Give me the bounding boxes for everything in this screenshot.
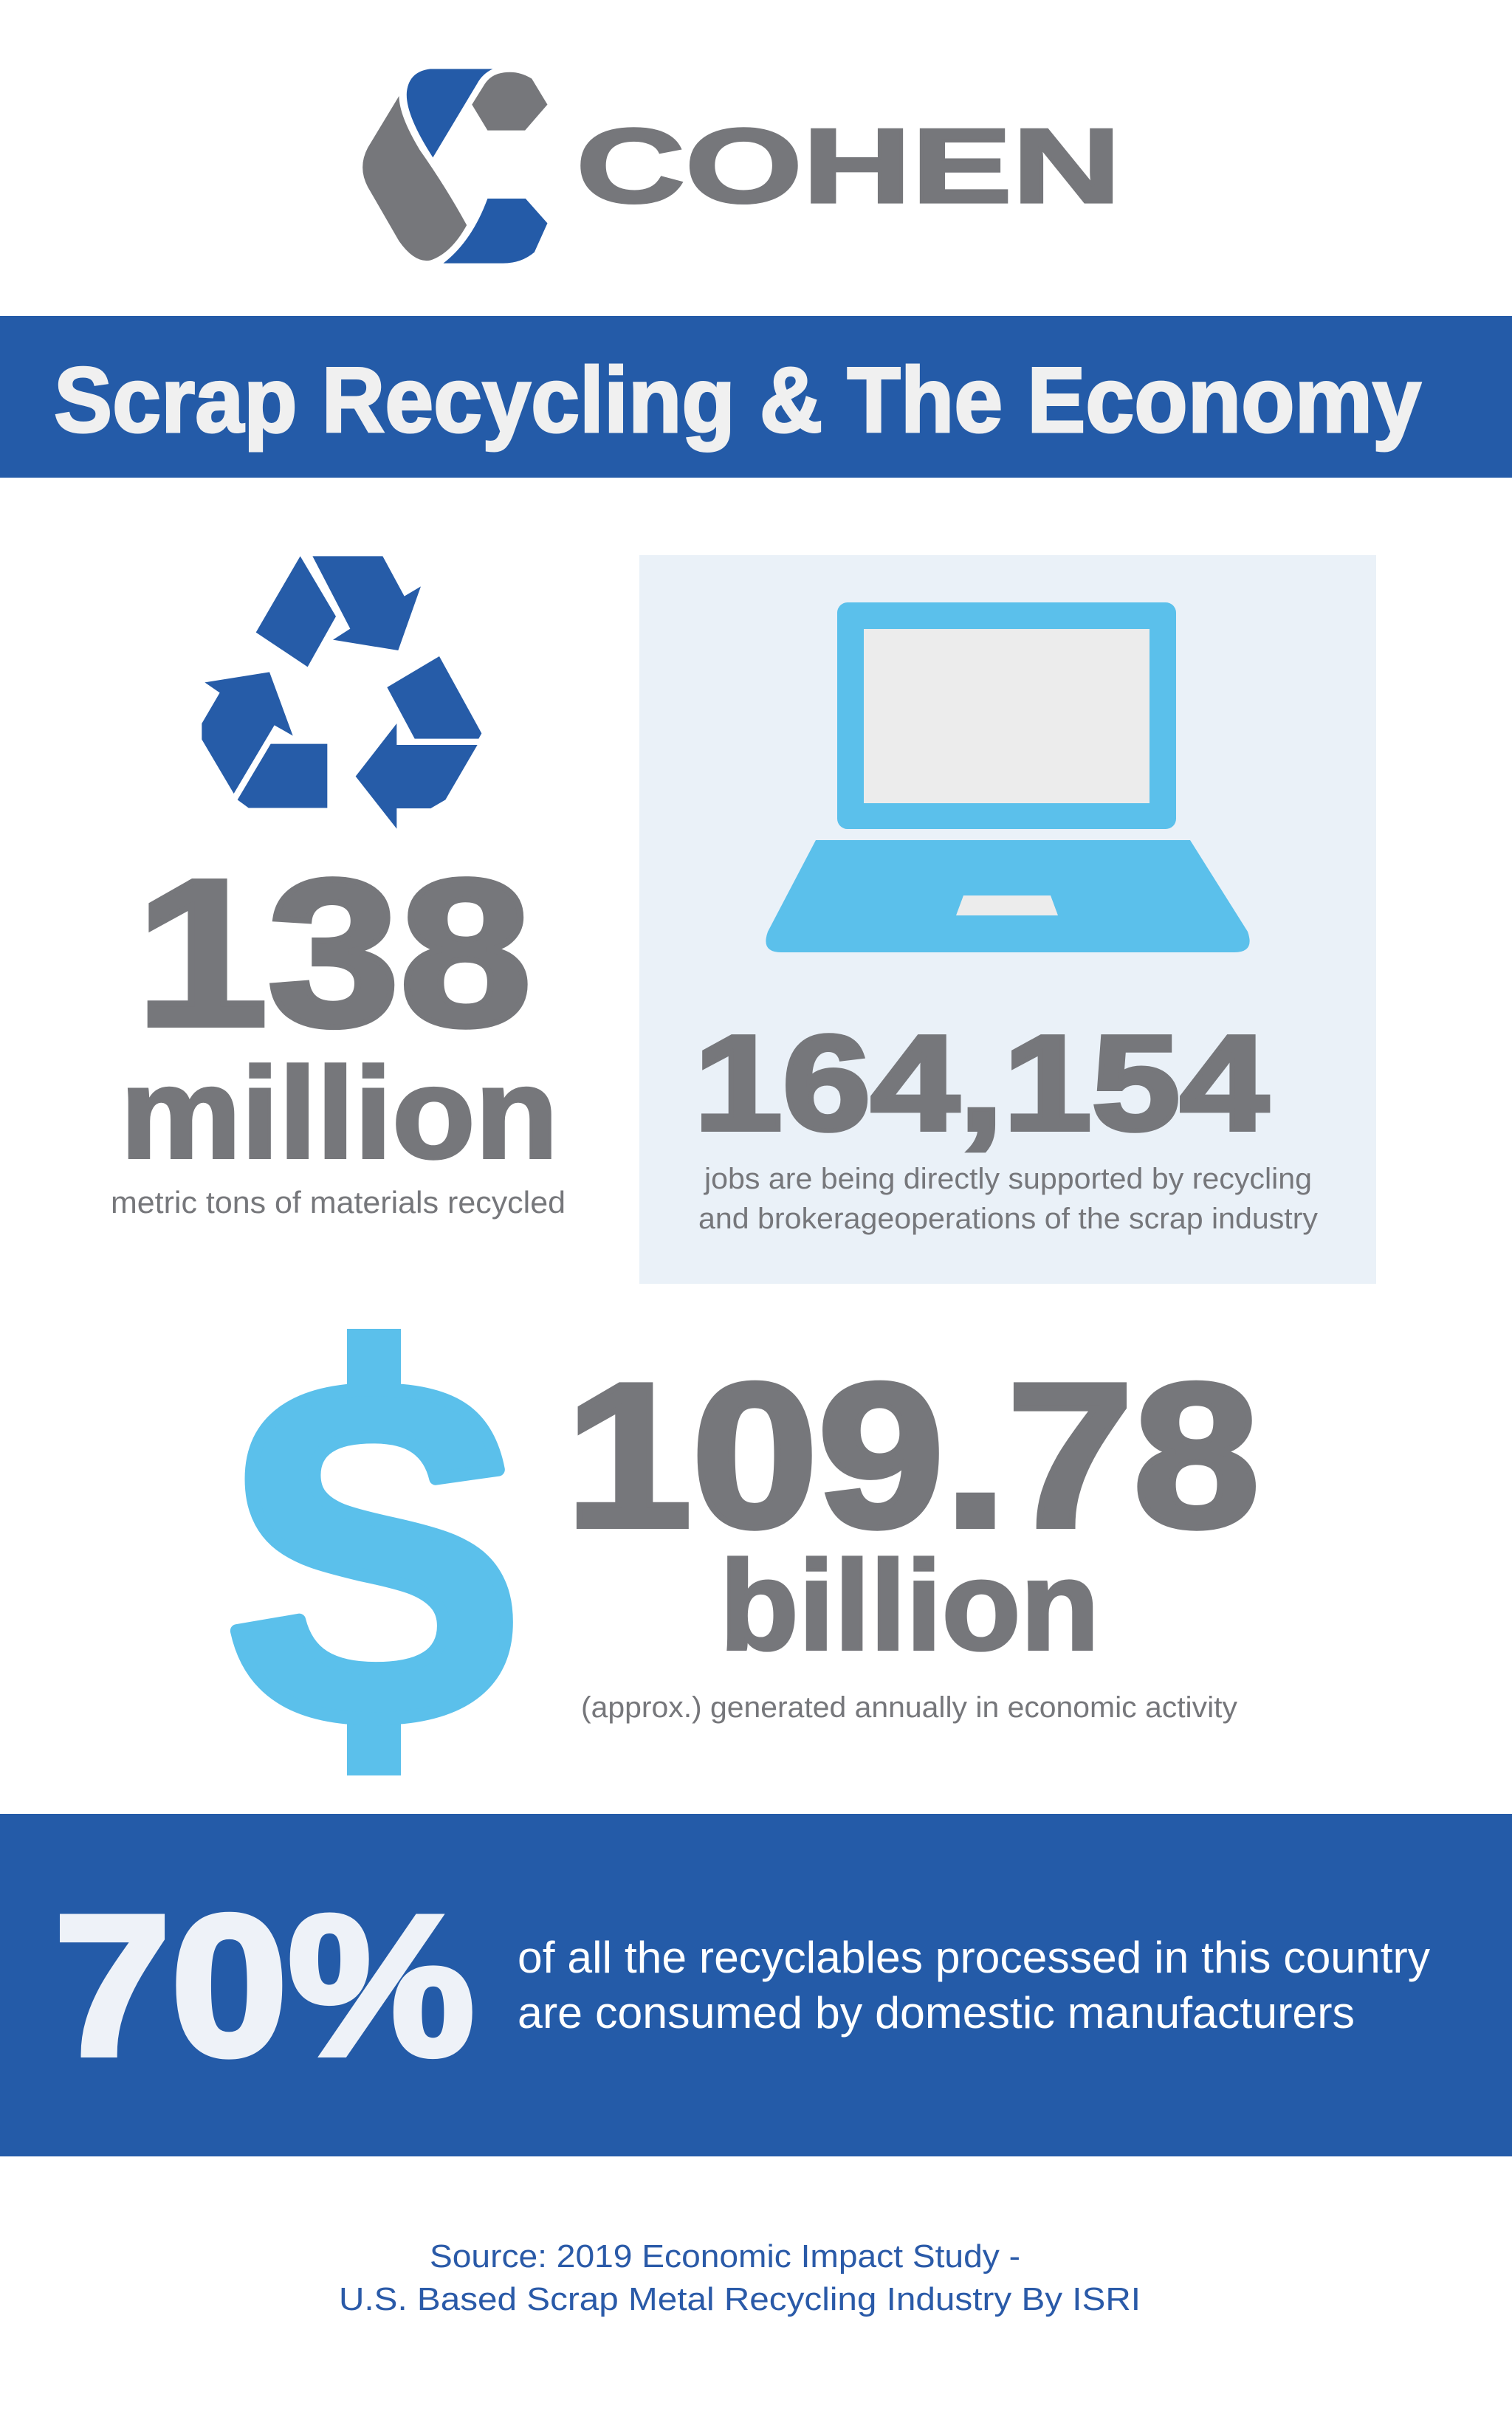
panel: jobs: and brokerageoperations of the scrap industry [698,1203,1318,1235]
icon: laptop [766,602,1250,952]
stat: 109.78 billion: billion [720,1535,1099,1677]
logo [362,69,1121,264]
stat: 109.78 billion: (approx.) generated annually in economic activity [581,1691,1237,1724]
stat: 138 million: 138 [136,836,532,1069]
stat: 138 million [111,836,566,1220]
band: 70% [0,1814,1512,2156]
stat: 138 million: million [120,1042,558,1186]
source: Source: 2019 Economic Impact Study - [430,2238,1020,2275]
icon: dollar: S [224,1293,524,1813]
stat: 109.78 billion: 109.78 [566,1341,1260,1569]
stat: 138 million: metric tons of materials recycled [111,1185,566,1220]
logo wordmark: COHEN [576,107,1121,225]
title band [0,316,1512,478]
logo mark [362,69,547,264]
title: Scrap Recycling & The Economy [54,349,1421,452]
stat: 164,154: 164,154 [694,1007,1268,1158]
icon: recycle [202,556,481,829]
band: 70%: are consumed by domestic manufacturers [518,1988,1355,2038]
panel: jobs: jobs are being directly supported by recycling [704,1163,1312,1195]
band: 70%: 70% [54,1874,475,2097]
stat: 109.78 billion [566,1341,1260,1724]
panel: jobs [639,555,1376,1284]
source [339,2238,1141,2317]
band: 70%: of all the recyclables processed in this country [518,1933,1430,1982]
source: U.S. Based Scrap Metal Recycling Industry By ISRI [339,2281,1141,2317]
